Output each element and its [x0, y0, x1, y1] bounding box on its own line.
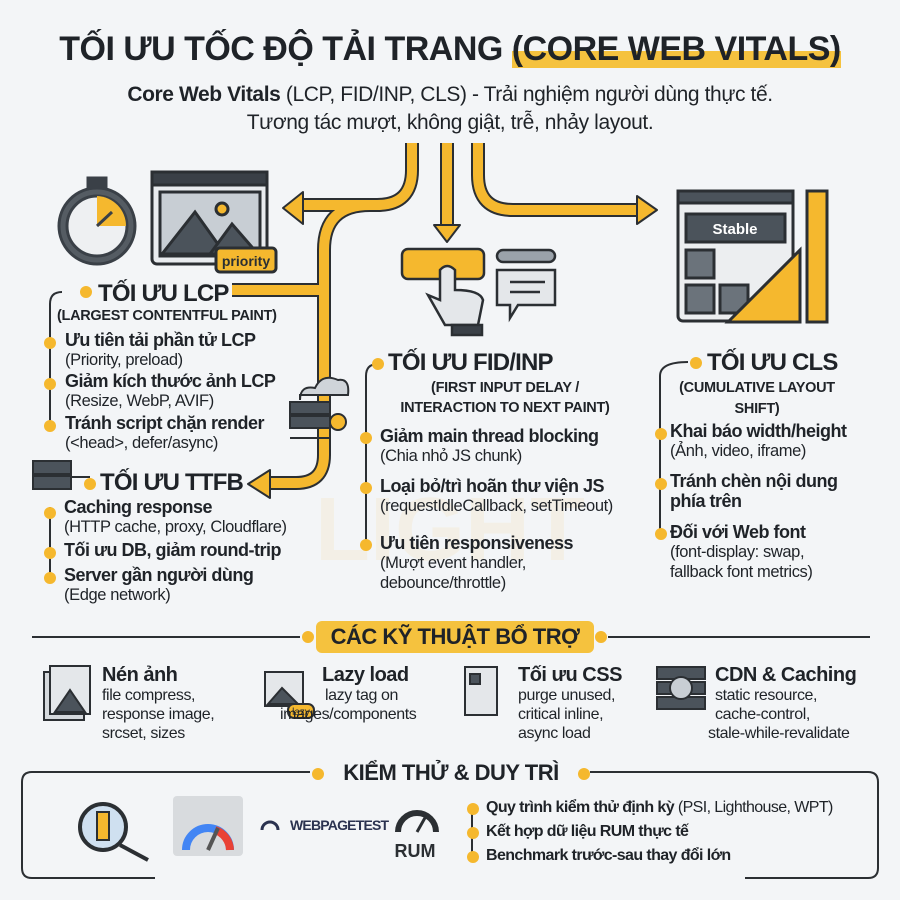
- section: CLS: Khai báo width/height: [670, 421, 846, 441]
- item: Nén ảnh: response image,: [102, 706, 214, 723]
- section: TTFB: (HTTP cache, proxy, Cloudflare): [64, 518, 287, 536]
- subtitle: Tương tác mượt, không giật, trễ, nhảy layout.: [247, 111, 653, 134]
- item: Tối ưu CSS: [518, 664, 622, 742]
- item: Tối ưu CSS: async load: [518, 725, 590, 742]
- icon: cloud server: [290, 378, 348, 438]
- item: Tối ưu CSS: Tối ưu CSS: [518, 664, 622, 686]
- section: FID/INP: INTERACTION TO NEXT PAINT): [400, 400, 610, 416]
- item: Nén ảnh: srcset, sizes: [102, 725, 185, 742]
- section: LCP: Tránh script chặn render: [65, 413, 264, 433]
- section: CLS: [655, 348, 847, 581]
- section: FID/INP: (Mượt event handler,: [380, 554, 526, 572]
- section: LCP: Giảm kích thước ảnh LCP: [65, 371, 275, 391]
- testing bullets: Kết hợp dữ liệu RUM thực tế: [486, 823, 688, 840]
- testing bullets: Benchmark trước-sau thay đổi lớn: [486, 847, 731, 864]
- section: TTFB: Tối ưu DB, giảm round-trip: [64, 540, 281, 560]
- item: Nén ảnh: file compress,: [102, 687, 195, 704]
- section: TTFB: Server gần người dùng: [64, 565, 253, 585]
- item: CDN: cache-control,: [715, 706, 810, 723]
- item: Lazy load: images/components: [280, 706, 416, 723]
- watermark: LIGHT: [315, 480, 585, 580]
- section: TTFB: Caching response: [64, 497, 212, 517]
- section: CLS: SHIFT): [735, 401, 779, 417]
- section: FID/INP: (requestIdleCallback, setTimeout): [380, 497, 613, 515]
- section: LCP: TỐI ƯU LCP: [98, 280, 229, 307]
- subtitle: Core Web Vitals (LCP, FID/INP, CLS) - Trải nghiệm người dùng thực tế.: [127, 83, 773, 106]
- item: CDN: stale-while-revalidate: [708, 725, 850, 742]
- section: FID/INP: [360, 348, 613, 592]
- icon: click button hand: [402, 249, 555, 335]
- item: CDN: static resource,: [715, 687, 817, 704]
- section: LCP: (<head>, defer/async): [65, 434, 218, 452]
- section: CLS: TỐI ƯU CLS: [707, 349, 838, 376]
- section: FID/INP: Ưu tiên responsiveness: [380, 533, 573, 553]
- heading: techniques: CÁC KỸ THUẬT BỔ TRỢ: [331, 624, 579, 649]
- icon: stopwatch: [59, 178, 135, 264]
- testing bullets: Quy trình kiểm thử định kỳ (PSI, Lighthouse, WPT): [486, 799, 833, 816]
- arrows and icons: RUM: [394, 841, 436, 861]
- arrows and icons: Stable: [712, 221, 758, 238]
- section: LCP: [44, 279, 277, 452]
- section: FID/INP: TỐI ƯU FID/INP: [388, 349, 553, 376]
- item: Lazy load: lazy tag on: [325, 687, 398, 704]
- item: Lazy load: Lazy load: [322, 664, 409, 686]
- item: Nén ảnh: Nén ảnh: [102, 664, 177, 686]
- section: TTFB: TỐI ƯU TTFB: [100, 469, 243, 496]
- section: FID/INP: debounce/throttle): [380, 574, 506, 592]
- section: LCP: (Priority, preload): [65, 351, 183, 369]
- section: CLS: (CUMULATIVE LAYOUT: [679, 380, 835, 396]
- item: CDN: CDN & Caching: [715, 664, 856, 686]
- item: CDN: [708, 664, 856, 742]
- section: CLS: fallback font metrics): [670, 563, 812, 581]
- item: Tối ưu CSS: critical inline,: [518, 706, 603, 723]
- section: CLS: (Ảnh, video, iframe): [670, 442, 806, 460]
- icon: browser image priority: [152, 172, 276, 272]
- arrows and icons: priority: [222, 253, 270, 269]
- section: FID/INP: Loại bỏ/trì hoãn thư viện JS: [380, 476, 604, 496]
- section: LCP: (LARGEST CONTENTFUL PAINT): [57, 308, 277, 324]
- section: FID/INP: (Chia nhỏ JS chunk): [380, 447, 522, 465]
- section: CLS: Tránh chèn nội dung: [670, 471, 838, 491]
- icon: ttfb server: [33, 461, 90, 489]
- section: LCP: (Resize, WebP, AVIF): [65, 392, 214, 410]
- item: Lazy load: [280, 664, 416, 723]
- subtitle: [127, 83, 773, 134]
- section: LCP: Ưu tiên tải phần tử LCP: [65, 330, 255, 350]
- section: FID/INP: (FIRST INPUT DELAY /: [431, 380, 579, 396]
- item: Tối ưu CSS: purge unused,: [518, 687, 615, 704]
- section: CLS: (font-display: swap,: [670, 543, 804, 561]
- heading: techniques: [302, 621, 607, 653]
- item: Nén ảnh: [102, 664, 214, 742]
- heading: testing: KIỂM THỬ & DUY TRÌ: [343, 760, 559, 785]
- section: TTFB: [44, 468, 287, 604]
- arrows and icons: lazy: [292, 707, 310, 718]
- section: CLS: Đối với Web font: [670, 522, 805, 542]
- title: TỐI ƯU TỐC ĐỘ TẢI TRANG (CORE WEB VITALS): [59, 30, 841, 68]
- testing bullets: [467, 799, 833, 864]
- icons: testing tools: [80, 804, 148, 860]
- section: FID/INP: Giảm main thread blocking: [380, 426, 599, 446]
- section: TTFB: (Edge network): [64, 586, 170, 604]
- icon: stable layout: [678, 191, 827, 322]
- arrows and icons: WEBPAGETEST: [290, 817, 390, 833]
- icons: techniques: [44, 666, 705, 720]
- section: CLS: phía trên: [670, 491, 742, 511]
- arrow: flow lines: [232, 143, 640, 483]
